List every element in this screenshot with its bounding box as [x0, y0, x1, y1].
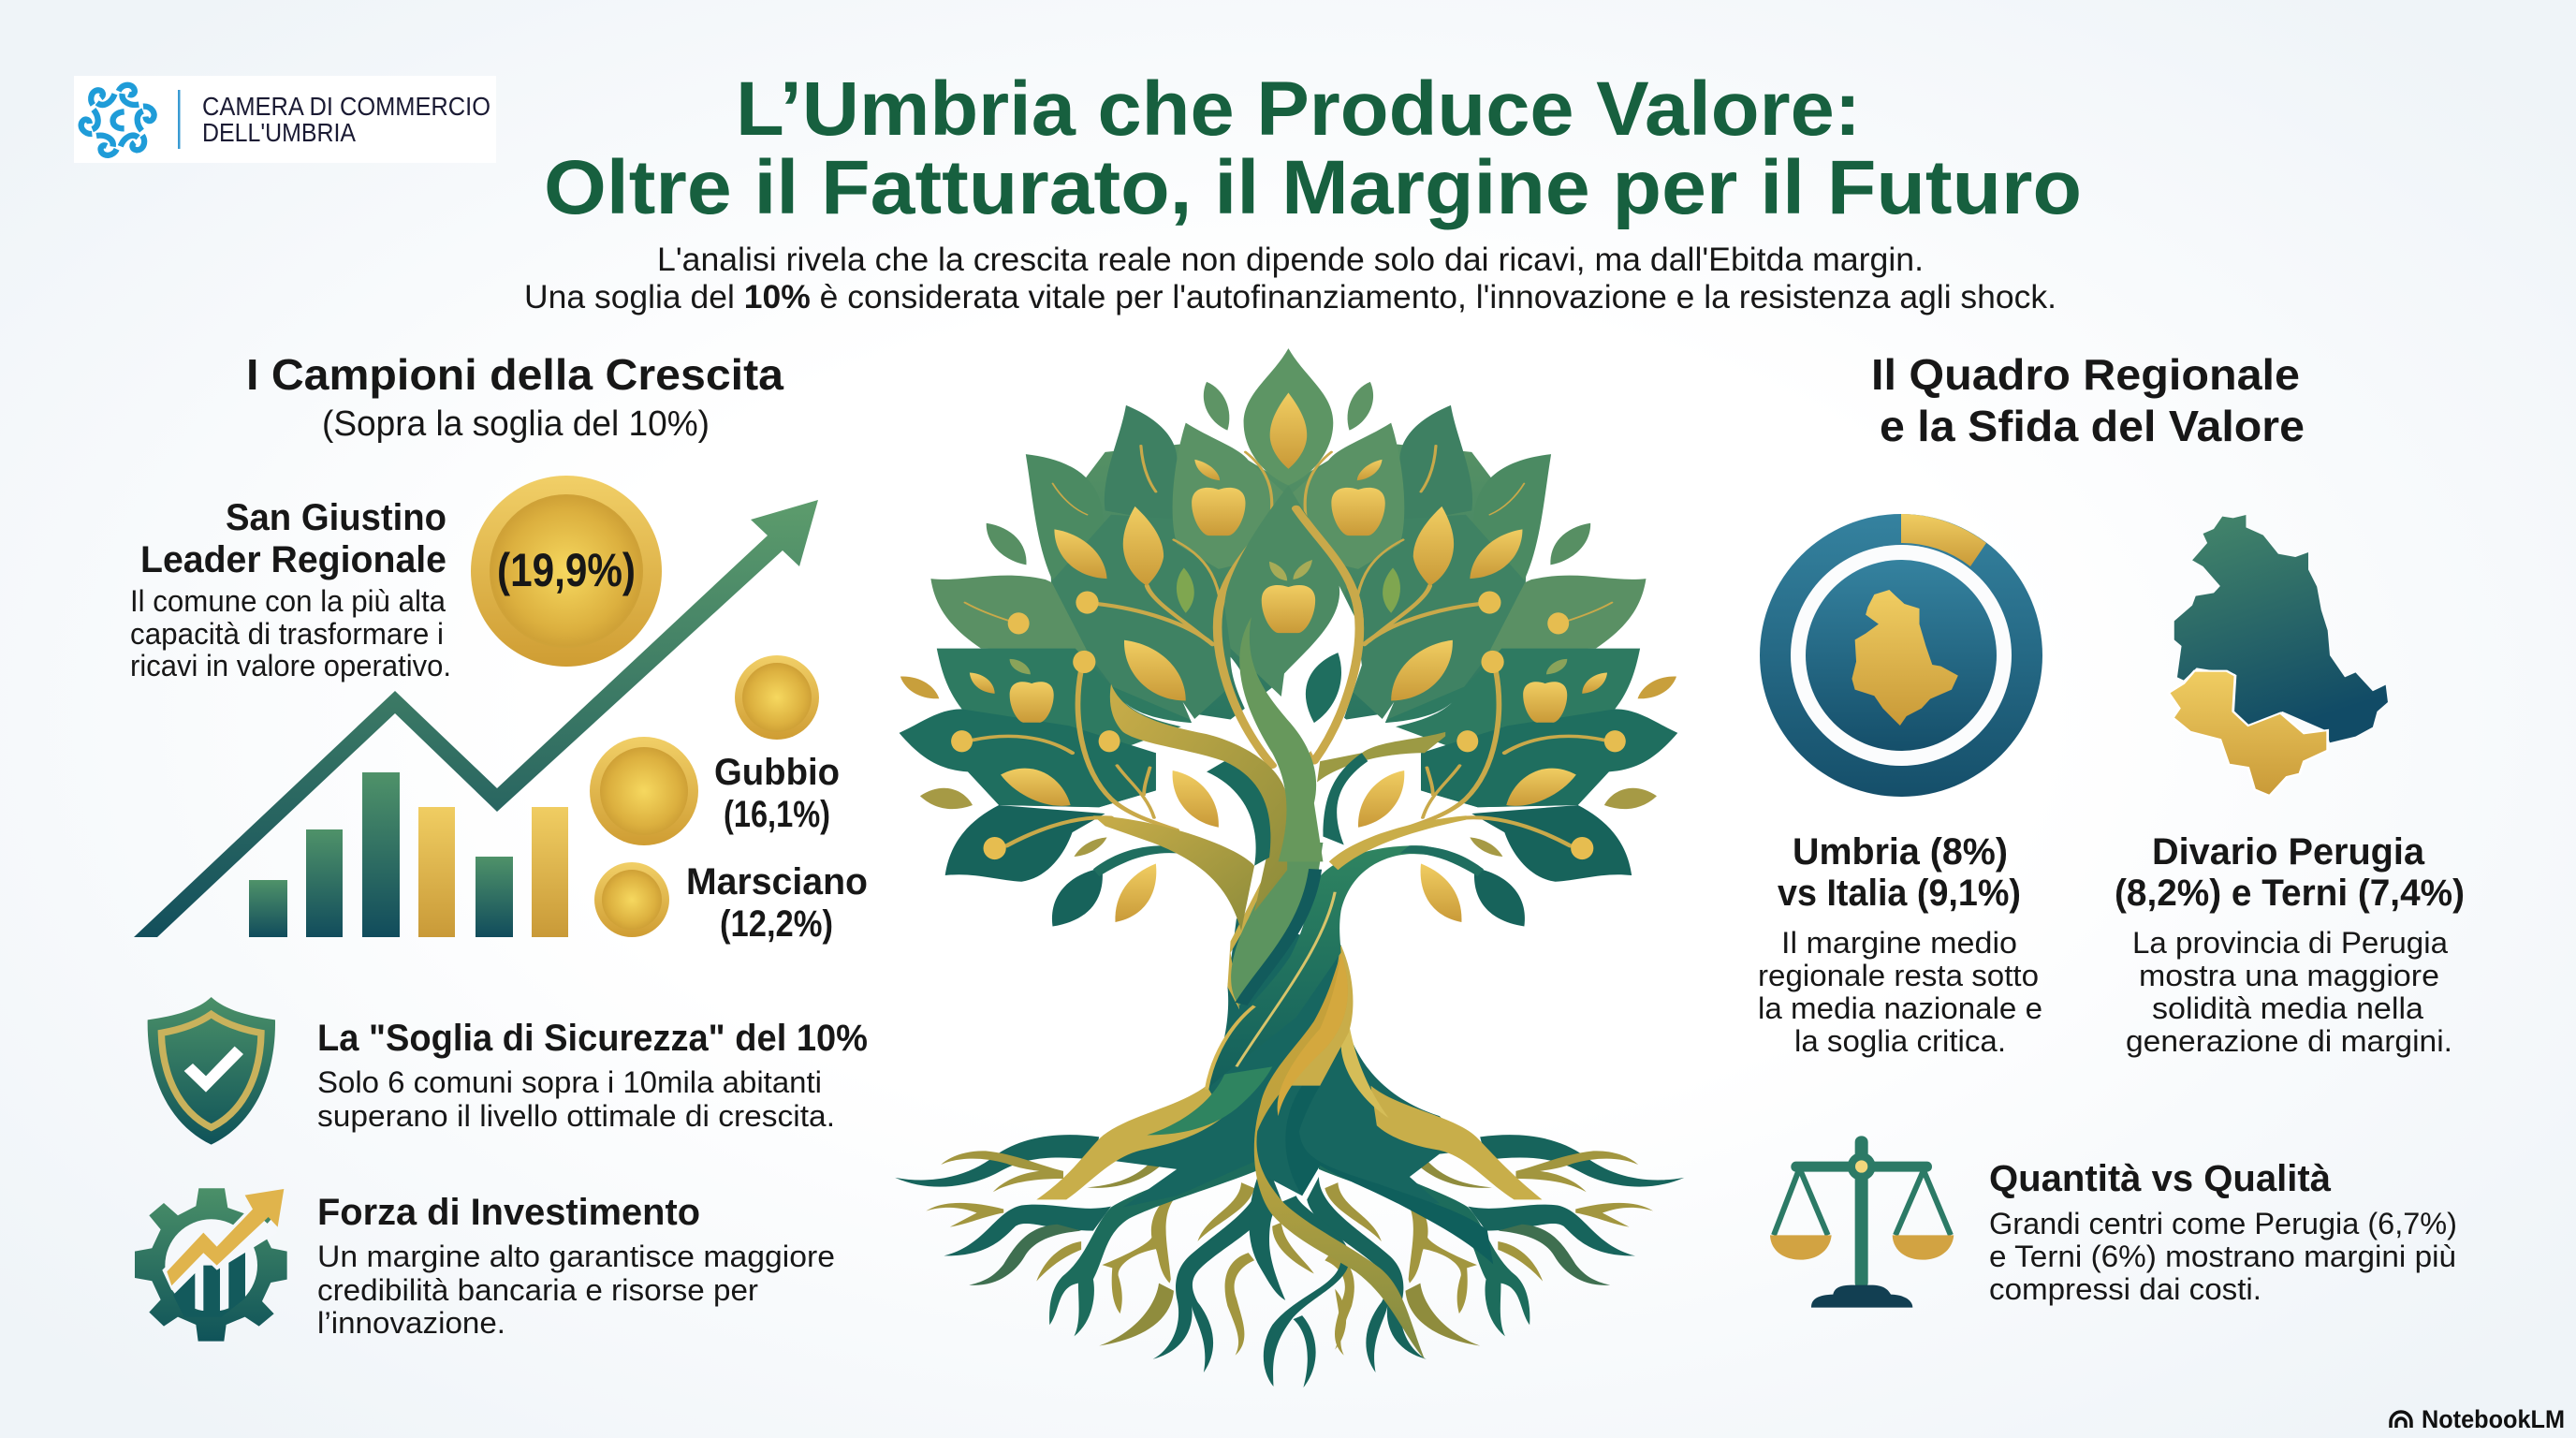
coin: 19,9%: (19,9%)	[497, 544, 636, 596]
label: Marsciano	[686, 861, 868, 945]
text block: Umbria vs Italia: Il margine medio	[1781, 926, 2017, 960]
text block: forza di investimento: Un margine alto garantisce maggiore	[317, 1240, 835, 1273]
arrow	[134, 500, 818, 937]
text block: Quantità vs Qualità: Quantità vs Qualità	[1989, 1158, 2332, 1199]
text block: San Giustino: Leader Regionale	[140, 539, 446, 580]
title: L’Umbria che Produce Valore:	[736, 66, 1861, 152]
text block: Umbria vs Italia	[1758, 831, 2042, 1058]
heading: Il Quadro Regionale: e la Sfida del Valore	[1880, 402, 2305, 450]
subtitle	[524, 242, 2056, 315]
heading: Il Quadro Regionale: Il Quadro Regionale	[1871, 350, 2300, 399]
bar chart with rising arrow	[134, 500, 818, 937]
text block: San Giustino: capacità di trasformare i	[130, 617, 444, 651]
text block: Divario Perugia e Terni	[2115, 831, 2465, 1058]
subtitle: L'analisi rivela che la crescita reale non dipende solo dai ricavi, ma dall'Ebitda margin.	[657, 242, 1924, 278]
text block: Divario Perugia e Terni: (8,2%) e Terni (7,4%)	[2115, 873, 2465, 914]
text block: forza di investimento	[317, 1192, 835, 1340]
text block: Umbria vs Italia: la media nazionale e	[1758, 991, 2042, 1025]
text block: Umbria vs Italia: Umbria (8%)	[1793, 831, 2008, 873]
text block: soglia di sicurezza	[317, 1018, 868, 1133]
text block: Divario Perugia e Terni: mostra una maggiore	[2139, 959, 2439, 992]
text block: San Giustino: ricavi in valore operativo.	[130, 649, 451, 682]
text block: San Giustino: Il comune con la più alta	[130, 584, 446, 618]
tree illustration	[895, 348, 1684, 1387]
text block: soglia di sicurezza: La "Soglia di Sicurezza" del 10%	[317, 1018, 868, 1059]
text block: soglia di sicurezza: Solo 6 comuni sopra i 10mila abitanti	[317, 1065, 822, 1099]
text block: Quantità vs Qualità: Grandi centri come Perugia (6,7%)	[1989, 1207, 2457, 1240]
icon: gear with arrow	[135, 1188, 287, 1342]
gold segment	[1901, 514, 1986, 566]
logo: Camera di Commercio: DELL'UMBRIA	[202, 118, 356, 147]
text block: forza di investimento: l’innovazione.	[317, 1306, 505, 1340]
trunk backing	[1105, 918, 1475, 1207]
label: Gubbio	[714, 752, 840, 835]
left limbs	[1110, 684, 1287, 912]
label: Gubbio: Gubbio	[714, 752, 840, 793]
text block: forza di investimento: credibilità bancaria e risorse per	[317, 1273, 758, 1307]
text block: Quantità vs Qualità: compressi dai costi.	[1989, 1272, 2261, 1306]
icon: balance scale	[1770, 1136, 1954, 1308]
text block: Divario Perugia e Terni: La provincia di Perugia	[2132, 926, 2448, 960]
text block: Umbria vs Italia: la soglia critica.	[1794, 1024, 2006, 1058]
text block: soglia di sicurezza: superano il livello ottimale di crescita.	[317, 1099, 835, 1133]
logo: Camera di Commercio: CAMERA DI COMMERCIO	[202, 92, 490, 121]
tree crown	[900, 348, 1677, 931]
icon: shield	[148, 997, 275, 1145]
text block: Divario Perugia e Terni: Divario Perugia	[2152, 831, 2425, 873]
heading: I Campioni della Crescita: I Campioni della Crescita	[246, 350, 783, 399]
title: Oltre il Fatturato, il Margine per il Futuro	[544, 145, 2082, 230]
donut chart with Umbria map	[1760, 514, 2042, 797]
label: Gubbio: (16,1%)	[724, 794, 830, 835]
text block: Quantità vs Qualità	[1989, 1158, 2457, 1306]
heading: I Campioni della Crescita: (Sopra la soglia del 10%)	[322, 404, 710, 444]
center body	[1224, 486, 1347, 697]
coins: decorative small	[590, 655, 819, 937]
map: Umbria	[1852, 590, 1958, 726]
text block: Divario Perugia e Terni: solidità media nella	[2152, 991, 2423, 1025]
logo: Camera di Commercio	[74, 76, 496, 163]
label: Marsciano: Marsciano	[686, 861, 868, 902]
text block: San Giustino	[130, 497, 451, 682]
map: provinces Perugia and Terni	[2169, 515, 2388, 796]
text block: San Giustino: San Giustino	[226, 497, 446, 538]
text block: Umbria vs Italia: vs Italia (9,1%)	[1778, 873, 2021, 914]
NotebookLM watermark: NotebookLM	[2422, 1405, 2565, 1433]
right limbs	[1317, 732, 1445, 783]
text block: Umbria vs Italia: regionale resta sotto	[1758, 959, 2039, 992]
coin: 19,9%	[471, 476, 662, 667]
icon: swirl emblem	[77, 84, 158, 156]
text block: Divario Perugia e Terni: generazione di margini.	[2126, 1024, 2452, 1058]
heading: Il Quadro Regionale	[1871, 350, 2305, 450]
text block: Quantità vs Qualità: e Terni (6%) mostrano margini più	[1989, 1240, 2456, 1273]
title	[544, 66, 2082, 230]
label: Marsciano: (12,2%)	[720, 903, 833, 945]
subtitle: Una soglia del 10% è considerata vitale per l'autofinanziamento, l'innovazione e la resistenza agli shock.	[524, 279, 2056, 315]
heading: I Campioni della Crescita	[246, 350, 783, 444]
tree roots and trunk	[895, 843, 1684, 1387]
text block: forza di investimento: Forza di Investimento	[317, 1192, 700, 1233]
